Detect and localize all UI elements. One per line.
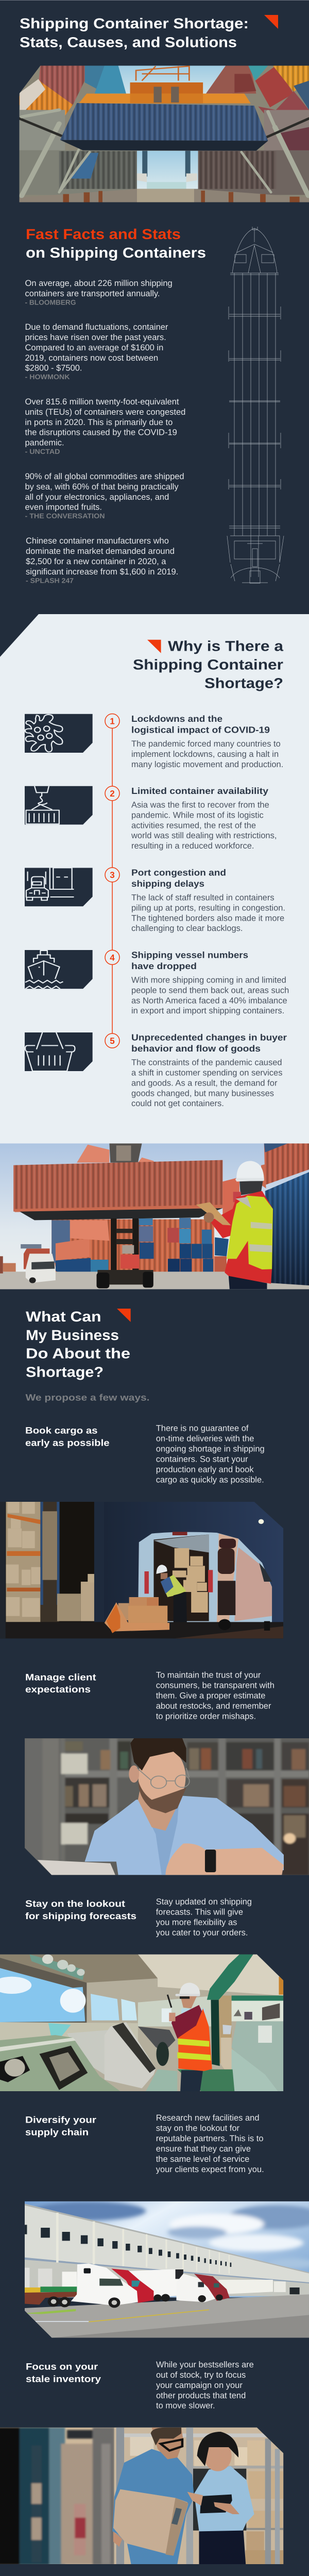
fact: container prices: Compared to an average of $1600 in (25, 343, 163, 352)
solution 1: book cargo: There is no guarantee of (156, 1424, 249, 1433)
cause 2: text: resulting in a reduced workforce. (131, 841, 254, 851)
fact: global commodities (25, 472, 184, 520)
cause 3: number badge (105, 868, 119, 882)
solution 2: manage client expectations: to prioritize order mishaps. (156, 1712, 256, 1721)
fact: container prices (25, 323, 168, 381)
fact: container manufacturers (26, 536, 178, 584)
fact: global commodities: even imported fruits. (25, 503, 102, 512)
cause 2: number badge (105, 786, 119, 801)
heading: why is there a shortage: Shipping Container (133, 656, 283, 673)
solution 4: diversify supply chain: the same level of service (156, 2155, 249, 2164)
cause 1: number badge: 1 (110, 716, 115, 726)
timeline connector (112, 721, 113, 1041)
solution 5: stale inventory: Focus on your (26, 2361, 98, 2371)
cause 5: text: behavior and flow of goods (131, 1043, 261, 1054)
solution 1: book cargo: cargo as quickly as possible. (156, 1475, 264, 1484)
fact: container manufacturers: $2,500 for a new container in 2020, a (26, 557, 166, 566)
fact: containers transported annually: - BLOOMBERG (25, 299, 76, 306)
fact: container manufacturers: - SPLASH 247 (26, 577, 74, 584)
cause 5: text: goods changed, but many businesses (131, 1089, 274, 1098)
fact: container manufacturers: dominate the market demanded around (26, 547, 175, 556)
solution 5: stale inventory: stale inventory (26, 2374, 101, 2384)
fact: global commodities: 90% of all global commodities are shipped (25, 472, 184, 481)
solution 3: shipping forecasts: Stay updated on shipping (156, 1897, 252, 1907)
cause 1: text (131, 714, 283, 769)
heading: fast facts: Fast Facts and Stats (26, 226, 181, 242)
heading: why is there a shortage: Shortage? (204, 675, 283, 691)
solution 2: manage client expectations: Manage client (25, 1672, 96, 1683)
top edge line (0, 0, 309, 1)
solution 2: manage client expectations: expectations (25, 1684, 91, 1694)
solution 1: book cargo: Book cargo as (25, 1426, 98, 1436)
fact: container prices: - HOWMONK (25, 373, 70, 381)
fact: container prices: $2800 - $7500. (25, 364, 82, 373)
icon: orange corner triangle (264, 15, 278, 29)
cause 1: text: logistical impact of COVID-19 (131, 725, 270, 735)
cause 3: text: The tightened borders also made it more (131, 913, 284, 923)
solution 3: shipping forecasts: for shipping forecasts (25, 1911, 136, 1921)
fact: congested TEUs: in ports in 2020. This is primarily due to (25, 418, 173, 427)
fact: congested TEUs: the disruptions caused by the COVID-19 (25, 428, 177, 437)
panel: why shortage background (0, 614, 309, 1144)
photo: two colleagues with box and tablet (0, 2428, 284, 2565)
fact: container manufacturers: Chinese container manufacturers who (26, 536, 169, 546)
photo: man checking his watch (25, 1738, 309, 1876)
solution 3: shipping forecasts: forecasts. This will give (156, 1908, 243, 1917)
cause 5: number badge: 5 (110, 1036, 115, 1046)
cause 5: text: a shift in customer spending on services (131, 1068, 282, 1077)
heading: what can my business do: Shortage? (26, 1364, 104, 1380)
heading: why is there a shortage: Why is There a (168, 638, 283, 654)
cause 5: text: The constraints of the pandemic caused (131, 1058, 282, 1067)
solution 1: book cargo: ongoing shortage in shipping (156, 1445, 265, 1454)
cause 3: text: shipping delays (131, 878, 204, 889)
icon: virus (25, 714, 93, 753)
icon: orange corner triangle (117, 1309, 131, 1322)
cause 2: text: Limited container availability (131, 786, 268, 796)
solution 4: diversify supply chain: stay on the lookout for (156, 2124, 240, 2133)
icon: crane hook and container (25, 786, 93, 825)
solution 2: manage client expectations: To maintain the trust of your (156, 1671, 261, 1680)
icon: truck and container (25, 868, 93, 906)
photo: worker loading van at warehouse (0, 1502, 283, 1639)
heading: what can my business do: My Business (26, 1327, 119, 1343)
cause 1: text: Lockdowns and the (131, 714, 222, 724)
cause 1: number badge (105, 714, 119, 728)
cause 2: text: pandemic. While most of its logistic (131, 810, 264, 820)
cause 4: number badge (105, 950, 119, 964)
solution 3: shipping forecasts: you more flexibility as (156, 1918, 237, 1927)
solution 1: book cargo: production early and book (156, 1465, 254, 1474)
solution 1: book cargo: containers. So start your (156, 1454, 248, 1464)
title: Stats, Causes, and Solutions (20, 34, 237, 50)
solution 4: diversify supply chain (25, 2113, 264, 2174)
cause 3: text: challenging to clear backlogs. (131, 924, 243, 933)
cause 3: text: piling up at ports, resulting in congestion. (131, 903, 285, 912)
heading: why is there a shortage (133, 638, 283, 691)
cause 4: text: in export and import shipping containers. (131, 1006, 284, 1015)
solution 1: book cargo: on-time deliveries with the (156, 1434, 254, 1444)
solution 5: stale inventory: other products that tend (156, 2391, 246, 2400)
photo: forklift carrying red container with worker (0, 1143, 309, 1289)
cause 5: text: Unprecedented changes in buyer (131, 1032, 287, 1042)
fact: container manufacturers: significant increase from $1,600 in 2019. (26, 567, 178, 577)
cause 5: text: and goods. As a result, the demand for (131, 1078, 278, 1088)
cause 4: text: people to send them back out, areas such (131, 986, 289, 995)
solution 4: diversify supply chain: supply chain (25, 2127, 89, 2137)
solution 5: stale inventory: While your bestsellers are (156, 2360, 254, 2369)
solution 5: stale inventory (26, 2360, 254, 2410)
cause 4: text: have dropped (131, 961, 197, 971)
fact: congested TEUs: - UNCTAD (25, 448, 60, 455)
heading: what can my business do (26, 1309, 130, 1380)
solution 3: shipping forecasts: Stay on the lookout (25, 1899, 125, 1909)
cause 4: text: Shipping vessel numbers (131, 950, 248, 960)
photo: officer on ship bridge (0, 1954, 283, 2092)
solution 5: stale inventory: to move slower. (156, 2401, 215, 2410)
cause 5: text: could not get containers. (131, 1099, 224, 1108)
cause 4: text (131, 950, 289, 1015)
heading: what can my business do: What Can (26, 1309, 101, 1325)
solution 4: diversify supply chain: your clients expect from you. (156, 2165, 264, 2174)
fact: global commodities: by sea, with 60% of that being practically (25, 482, 179, 492)
cause 2: text (131, 786, 277, 851)
solution 5: stale inventory: your campaign on your (156, 2381, 243, 2390)
heading: what can my business do: Do About the (26, 1346, 130, 1362)
solution 4: diversify supply chain: Research new facilities and (156, 2113, 260, 2123)
fact: congested TEUs (25, 397, 185, 455)
solution 3: shipping forecasts (25, 1897, 252, 1938)
cause 2: text: Asia was the first to recover from the (131, 800, 269, 809)
icon: shopping basket (25, 1032, 93, 1071)
cause 3: text: The lack of staff resulted in containers (131, 893, 274, 902)
cause 2: number badge: 2 (110, 789, 115, 799)
cause 2: text: world was still dealing with restrictions, (131, 831, 277, 840)
cause 1: text: The pandemic forced many countries to (131, 739, 281, 749)
cause 4: text: With more shipping coming in and limited (131, 976, 286, 985)
solution 2: manage client expectations: them. Give a proper estimate (156, 1691, 265, 1701)
fact: congested TEUs: pandemic. (25, 438, 64, 447)
solution 3: shipping forecasts: you cater to your orders. (156, 1928, 248, 1938)
solution 5: stale inventory: out of stock, try to focus (156, 2370, 246, 2380)
cause 3: number badge: 3 (110, 870, 115, 880)
cause 1: text: many logistic movement and production. (131, 760, 283, 769)
cause 3: text: Port congestion and (131, 867, 226, 877)
fact: global commodities: all of your electronics, appliances, and (25, 493, 169, 502)
solution 1: book cargo (25, 1424, 265, 1484)
cause 1: text: implement lockdowns, causing a halt in (131, 750, 279, 759)
solution 1: book cargo: early as possible (25, 1438, 109, 1448)
fact: containers transported annually: On average, about 226 million shipping (25, 279, 173, 288)
solution 4: diversify supply chain: reputable partners. This is to (156, 2134, 264, 2143)
title (20, 15, 249, 50)
fact: congested TEUs: units (TEUs) of containers were congested (25, 408, 185, 417)
fact: container prices: prices have risen over the past years. (25, 333, 166, 342)
icon: orange corner triangle (147, 640, 161, 653)
cause 5: text (131, 1032, 287, 1108)
fact: container prices: 2019, containers now cost between (25, 353, 158, 363)
diagram: container ship blueprint (227, 227, 284, 583)
cause 2: text: activities resumed, the rest of the (131, 821, 256, 830)
cause 4: number badge: 4 (110, 953, 115, 962)
fact: congested TEUs: Over 815.6 million twenty-foot-equivalent (25, 397, 179, 406)
photo: container lifted by crane on ship (19, 65, 309, 202)
solution 2: manage client expectations: consumers, be transparent with (156, 1681, 274, 1690)
heading: fast facts (26, 226, 206, 261)
cause 5: number badge (105, 1033, 119, 1048)
fact: containers transported annually: containers are transported annually. (25, 289, 160, 298)
cause 4: text: as North America faced a 40% imbalance (131, 996, 287, 1005)
photo: trucks at loading docks (25, 2201, 309, 2338)
solution 4: diversify supply chain: ensure that they can give (156, 2144, 251, 2154)
subheading: We propose a few ways. (26, 1392, 149, 1402)
fact: global commodities: - THE CONVERSATION (25, 512, 105, 520)
solution 2: manage client expectations: about restocks, and remember (156, 1702, 271, 1711)
fact: containers transported annually (25, 279, 173, 306)
icon: cargo ship (25, 950, 93, 989)
solution 2: manage client expectations (25, 1671, 274, 1721)
fact: container prices: Due to demand fluctuations, container (25, 323, 168, 332)
heading: fast facts: on Shipping Containers (26, 245, 206, 261)
title: Shipping Container Shortage: (20, 15, 249, 31)
cause 3: text (131, 867, 285, 933)
solution 4: diversify supply chain: Diversify your (25, 2115, 96, 2125)
